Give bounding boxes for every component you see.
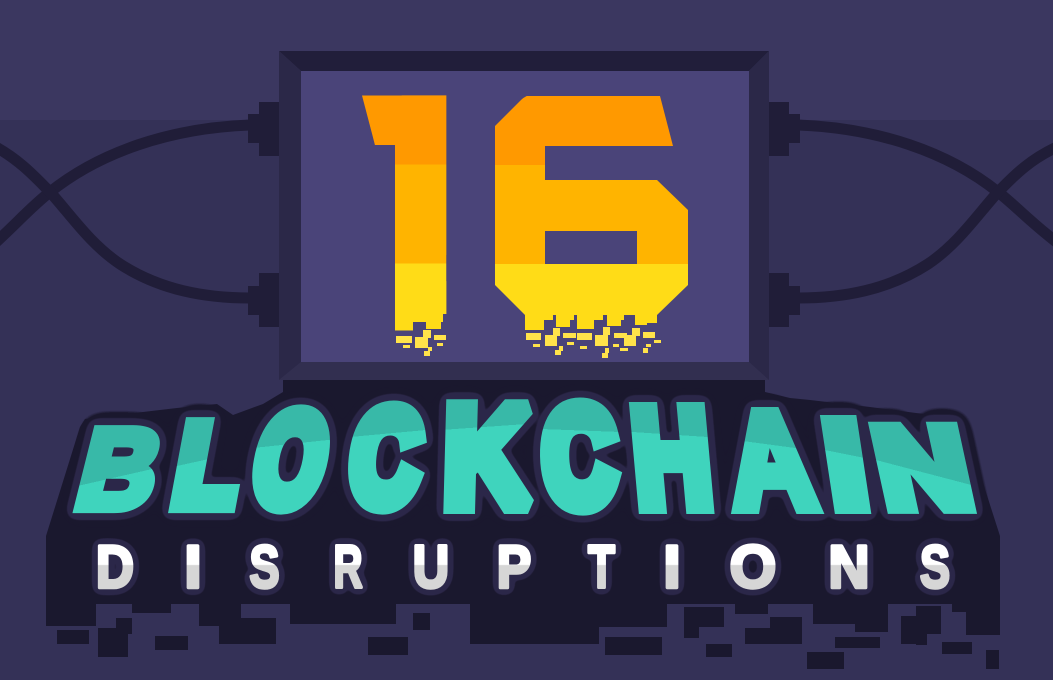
- title: BLOCKCHAIN: K: [442, 377, 533, 536]
- subtitle: DISRUPTIONS: I: [184, 534, 202, 601]
- right cables: [798, 125, 1053, 298]
- title: BLOCKCHAIN: [65, 377, 982, 538]
- monitor frame: [279, 51, 769, 380]
- title: BLOCKCHAIN: N: [863, 404, 982, 532]
- subtitle: DISRUPTIONS: [96, 533, 950, 601]
- subtitle: DISRUPTIONS: U: [413, 533, 449, 600]
- title: BLOCKCHAIN: O: [243, 386, 339, 532]
- title: BLOCKCHAIN: I: [816, 395, 875, 533]
- big number 16: [339, 36, 725, 394]
- title: BLOCKCHAIN: C: [542, 380, 616, 534]
- subtitle: DISRUPTIONS: D: [96, 533, 134, 600]
- title: BLOCKCHAIN: A: [720, 384, 823, 538]
- title: BLOCKCHAIN: B: [65, 406, 174, 532]
- digit 1 flag: [362, 96, 425, 145]
- left connectors: [248, 102, 279, 327]
- subtitle: DISRUPTIONS: T: [588, 534, 615, 601]
- title: BLOCKCHAIN: C: [344, 384, 428, 532]
- subtitle: DISRUPTIONS: N: [828, 534, 870, 601]
- subtitle: DISRUPTIONS: I: [663, 534, 681, 601]
- digit 1: 1: [339, 36, 489, 390]
- subtitle: DISRUPTIONS: S: [249, 534, 280, 601]
- title: BLOCKCHAIN: H: [626, 382, 717, 536]
- subtitle: DISRUPTIONS: S: [920, 534, 950, 601]
- screen-coloured stencil trims for the digits: [340, 71, 725, 362]
- subtitle: DISRUPTIONS: O: [730, 534, 776, 600]
- digit 6: 6: [491, 46, 691, 394]
- dark title block with pixel crumble: [46, 379, 1000, 669]
- right connectors: [769, 102, 800, 327]
- subtitle: DISRUPTIONS: P: [497, 533, 531, 600]
- left cables: [0, 125, 250, 298]
- background: upper band: [0, 0, 1053, 120]
- monitor screen: [301, 71, 749, 362]
- title: BLOCKCHAIN: L: [165, 401, 252, 530]
- subtitle: DISRUPTIONS: R: [333, 533, 363, 600]
- pixel debris: [396, 327, 661, 358]
